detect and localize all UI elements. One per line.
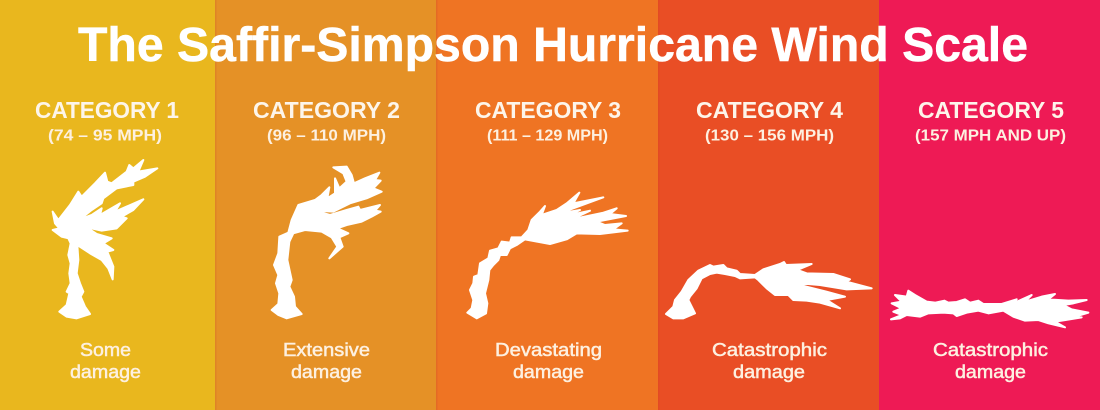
damage label: category 4: Catastrophic: [712, 340, 827, 360]
panel: category 5: [879, 0, 1100, 410]
panel: category 2: [215, 0, 436, 410]
damage label: category 5: Catastrophic: [933, 340, 1048, 360]
damage label: category 1: Some: [80, 340, 131, 360]
heading: category 5: CATEGORY 5: [918, 97, 1064, 123]
damage label: category 1: damage: [70, 362, 141, 382]
damage label: category 4: damage: [733, 362, 805, 382]
damage label: category 2: [283, 340, 370, 382]
damage label: category 3: Devastating: [495, 340, 602, 360]
icon: palm tree, category 4: [666, 262, 872, 318]
icon: palm tree, category 5: [891, 291, 1088, 327]
panel: category 3: [436, 0, 658, 410]
wind speed: category 5: (157 MPH AND UP): [915, 128, 1066, 144]
wind speed: category 4: (130 – 156 MPH): [705, 128, 834, 144]
damage label: category 2: damage: [291, 362, 362, 382]
heading: category 3: CATEGORY 3: [475, 97, 621, 123]
icon: palm tree, category 3: [467, 193, 628, 318]
damage label: category 2: Extensive: [283, 340, 370, 360]
panel: category 4: [658, 0, 879, 410]
damage label: category 5: damage: [955, 362, 1026, 382]
icon: palm tree, category 1: [53, 160, 157, 318]
wind speed: category 3: (111 – 129 MPH): [487, 128, 608, 144]
heading: category 4: CATEGORY 4: [696, 97, 843, 123]
heading: category 2: CATEGORY 2: [253, 97, 400, 123]
damage label: category 4: [712, 340, 827, 382]
wind speed: category 1: (74 – 95 MPH): [48, 128, 162, 144]
panel: category 1: [0, 0, 215, 410]
damage label: category 3: damage: [513, 362, 584, 382]
damage label: category 5: [933, 340, 1048, 382]
title: The Saffir-Simpson Hurricane Wind Scale: [78, 19, 1028, 72]
wind speed: category 2: (96 – 110 MPH): [267, 128, 386, 144]
damage label: category 3: [495, 340, 602, 382]
damage label: category 1: [70, 340, 141, 382]
heading: category 1: CATEGORY 1: [35, 97, 179, 123]
icon: palm tree, category 2: [272, 167, 382, 318]
